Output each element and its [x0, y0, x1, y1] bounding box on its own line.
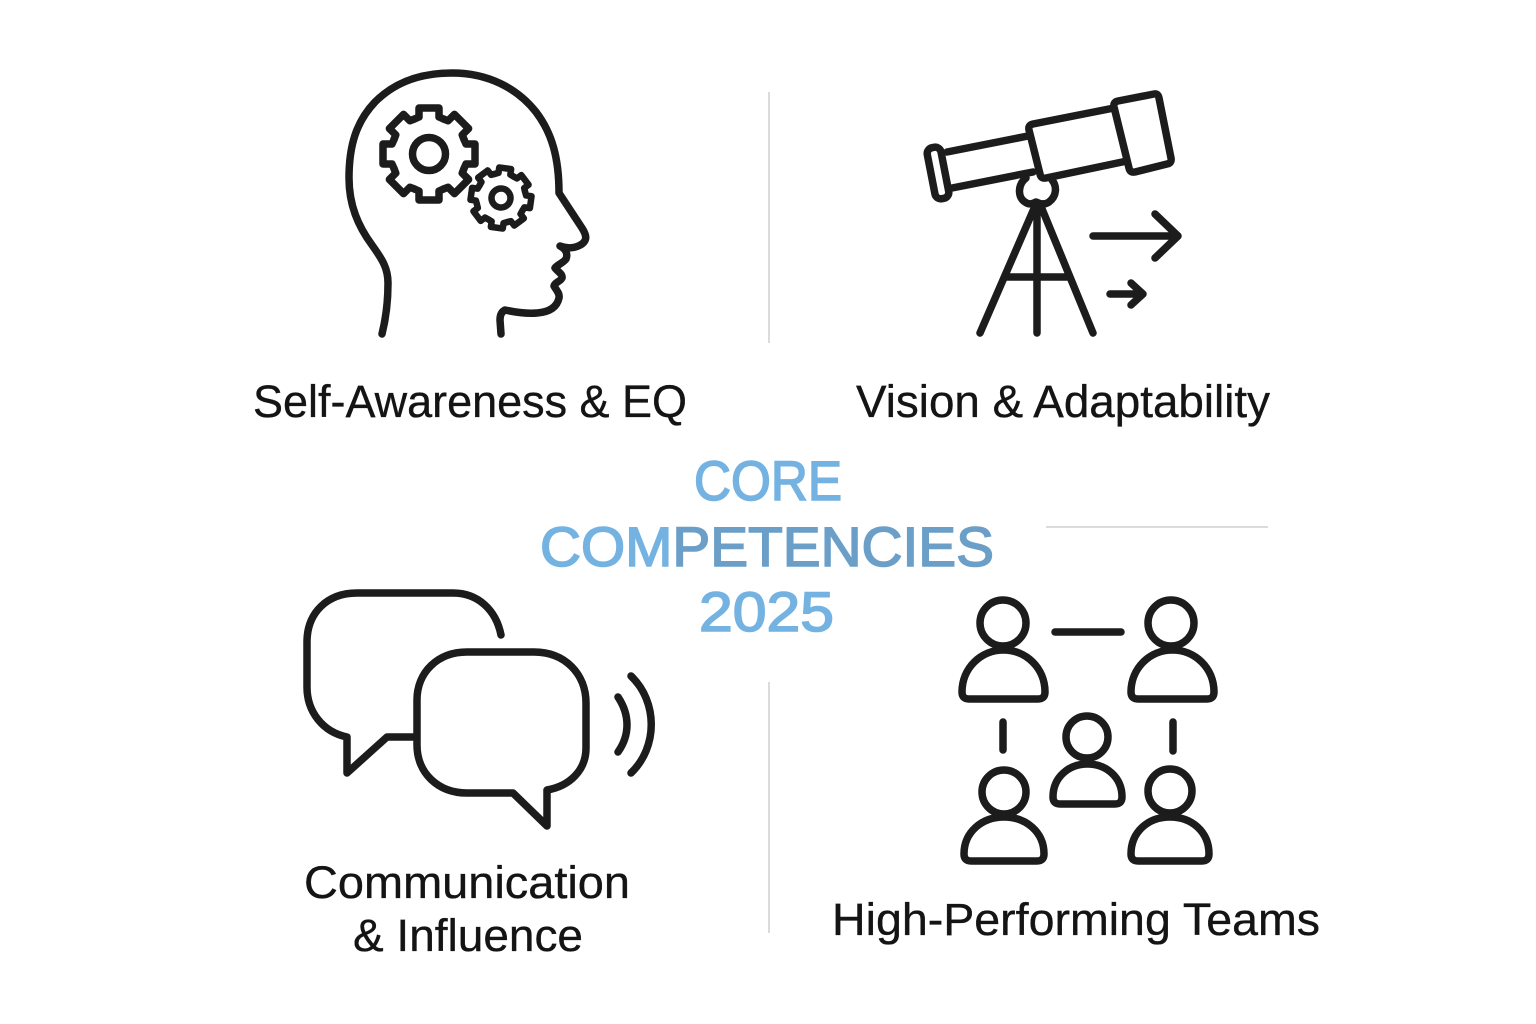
person top left [962, 600, 1045, 699]
title: COMPETENCIES [540, 515, 994, 578]
title [540, 449, 994, 643]
head outline [349, 73, 586, 334]
small arrow [1110, 283, 1143, 305]
person center [1053, 716, 1122, 804]
label: self-awareness and EQ: Self-Awareness & EQ [253, 376, 687, 427]
label: high-performing teams: High-Performing Teams [832, 894, 1320, 945]
panel: high-performing teams [832, 600, 1320, 945]
front tube [1114, 94, 1171, 172]
title: CORE [694, 449, 842, 512]
icon: speech bubbles [307, 593, 651, 826]
icon: team network [962, 600, 1214, 861]
front bubble [417, 652, 586, 826]
label: vision and adaptability: Vision & Adaptability [856, 376, 1271, 427]
label: communication and influence [304, 857, 630, 961]
back bubble [307, 593, 501, 773]
person top right [1131, 600, 1214, 699]
person bottom right [1131, 769, 1209, 861]
eyepiece [926, 146, 950, 200]
connector lines [1003, 632, 1173, 751]
panel: vision and adaptability [856, 94, 1271, 427]
narrow tube [947, 136, 1033, 188]
panel: self-awareness and EQ [253, 73, 687, 427]
large arrow [1093, 214, 1178, 258]
tripod [980, 204, 1093, 333]
icon: head with gears [349, 73, 586, 334]
icon: telescope with arrows [926, 94, 1178, 333]
label: communication and influence: & Influence [353, 910, 583, 961]
middle tube [1029, 108, 1127, 178]
small gear [467, 164, 535, 232]
title: 2025 [699, 580, 834, 643]
sound waves [618, 676, 651, 773]
panel: communication and influence [304, 593, 651, 961]
person bottom left [964, 770, 1044, 861]
label: communication and influence: Communication [304, 857, 630, 908]
large gear [383, 108, 475, 200]
mount ring [1019, 178, 1055, 204]
